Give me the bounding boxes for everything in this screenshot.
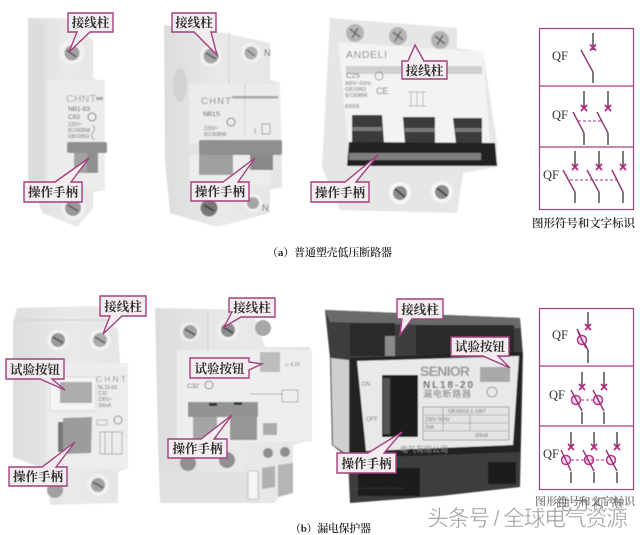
label: handle 3: 操作手柄 — [315, 185, 365, 200]
symbol panel: residual current symbols — [539, 308, 634, 490]
label: handle 6 — [337, 432, 402, 473]
symbol panel: residual current symbols: QF — [543, 447, 559, 461]
breaker photo: SENIOR NL18-20: 230V 50Hz — [425, 417, 450, 423]
breaker photo: SENIOR NL18-20: · · · · · · · · · · · · · · · · — [355, 486, 403, 492]
breaker photo: 3-pole ANDELI C25: GB10963 — [345, 87, 366, 93]
breaker photo: 3-pole ANDELI C25: CE — [376, 86, 389, 96]
label: handle 1 — [24, 158, 89, 202]
breaker photo: 1-pole CHNT NB1-63: NB1-63 — [68, 106, 90, 113]
breaker photo: 1-pole CHNT NB1-63 — [28, 18, 107, 227]
breaker photo: CHNT NL16-63 residual current: 230V~ — [98, 397, 113, 403]
breaker photo: 3-pole ANDELI C25 — [322, 18, 497, 213]
breaker photo: 2-pole CHNT NB1S: NB1S — [203, 111, 221, 118]
symbol panel: ordinary breaker symbols — [539, 28, 634, 210]
breaker photo: SENIOR NL18-20: 20A — [425, 425, 435, 431]
label: terminal 1: 接线柱 — [72, 15, 110, 30]
label: terminal 4: 接线柱 — [104, 299, 142, 314]
caption: symbol panel a: 图形符号和文字标识 — [532, 216, 636, 230]
symbol panel: ordinary breaker symbols: QF — [543, 168, 559, 182]
label: terminal 2 — [172, 13, 217, 55]
breaker photo: 1-pole CHNT NB1-63: CHNT — [66, 93, 97, 105]
breaker photo: 1-pole CHNT NB1-63: C63 — [68, 114, 80, 121]
caption: section a: （a）普通塑壳低压断路器 — [267, 245, 392, 259]
breaker photo: 2-pole CHNT NB1S: N — [262, 203, 268, 213]
label: handle 4 — [9, 442, 75, 486]
label: handle 1: 操作手柄 — [28, 184, 78, 200]
symbol panel: residual current symbols: QF — [549, 388, 565, 402]
breaker photo: CHNT NL16-63 residual current: NL16-63 — [98, 385, 117, 391]
label: terminal 6 — [397, 299, 443, 335]
breaker photo: CHNT NL16-63 residual current: C32 — [98, 391, 107, 397]
breaker photo: 3-pole ANDELI C25: ANDELI — [346, 49, 387, 61]
watermark: account name overlay: 电力视觉 — [555, 496, 625, 514]
label: handle 5 — [168, 415, 232, 458]
breaker photo: SENIOR NL18-20: NL18-20 — [423, 380, 473, 391]
label: test button 6: 试验按钮 — [455, 339, 505, 354]
breaker photo: 2-pole CHNT NB1S: IEC60898 — [204, 132, 226, 138]
breaker photo: SENIOR NL18-20: 30mA — [475, 433, 489, 439]
breaker photo: CHNT C32 residual current: C32 — [187, 383, 199, 390]
breaker photo: SENIOR NL18-20 — [325, 310, 523, 503]
breaker photo: SENIOR NL18-20: SENIOR — [420, 363, 470, 379]
symbol panel: residual current symbols: QF — [552, 328, 568, 342]
breaker photo: SENIOR NL18-20: ON — [362, 382, 370, 388]
label: test button 4: 试验按钮 — [10, 362, 60, 377]
label: handle 2 — [191, 158, 255, 201]
label: terminal 6: 接线柱 — [401, 302, 439, 317]
breaker photo: SENIOR NL18-20: 电气有限公司 — [400, 444, 448, 455]
labels — [6, 13, 510, 486]
breaker photo: 1-pole CHNT NB1-63: GB10963 — [68, 134, 89, 140]
breaker photo: CHNT NL16-63 residual current — [13, 306, 128, 505]
caption: section b: （b）漏电保护器 — [290, 521, 371, 535]
label: terminal 3: 接线柱 — [406, 63, 444, 78]
symbol panel: ordinary breaker symbols: QF — [552, 49, 568, 63]
breaker photo: SENIOR NL18-20: 漏电断路器 — [423, 387, 471, 400]
label: handle 4: 操作手柄 — [13, 469, 63, 484]
caption: symbol panel b (partly covered): 图形符号和文字标识 — [535, 494, 636, 508]
breaker photo: SENIOR NL18-20: OFF — [366, 417, 378, 423]
breaker photo: 2-pole CHNT NB1S: N — [264, 48, 270, 58]
breaker photo: 3-pole ANDELI C25: 400V~50Hz — [345, 81, 372, 87]
breaker photo: 2-pole CHNT NB1S — [164, 25, 282, 227]
label: handle 3 — [311, 155, 378, 202]
label: test button 5: 试验按钮 — [194, 361, 245, 376]
breaker photo: CHNT C32 residual current: ◇ 4.15 — [285, 362, 300, 368]
breaker photo: 2-pole CHNT NB1S: 220V~ — [204, 126, 219, 132]
breaker photo: CHNT C32 residual current — [155, 308, 312, 503]
label: terminal 4 — [100, 296, 146, 334]
breaker photo: CHNT NL16-63 residual current: 30mA — [98, 403, 112, 409]
watermark: 头条号 / 全球电气资源 — [427, 506, 628, 531]
label: terminal 5 — [224, 298, 275, 327]
breaker photo: SENIOR NL18-20: GB16916.1-1997 — [448, 409, 486, 415]
label: test button 6 — [451, 337, 510, 368]
breaker photo: 1-pole CHNT NB1-63: IEC60898 — [68, 128, 90, 134]
label: terminal 2: 接线柱 — [175, 15, 213, 30]
label: handle 5: 操作手柄 — [172, 441, 223, 456]
breaker photo: 3-pole ANDELI C25: 6000A — [345, 104, 360, 110]
label: test button 5 — [190, 358, 262, 378]
breaker photo: CHNT NL16-63 residual current: CHNT — [96, 374, 126, 384]
breaker photo: 1-pole CHNT NB1-63: 220V~ — [68, 122, 83, 128]
breaker photo: 3-pole ANDELI C25: C25 — [346, 71, 360, 80]
label: handle 2: 操作手柄 — [195, 184, 245, 199]
label: terminal 1 — [68, 13, 113, 52]
symbol panel: ordinary breaker symbols: QF — [552, 108, 568, 122]
label: terminal 3 — [402, 45, 447, 79]
label: test button 4 — [6, 359, 65, 390]
breaker photo: 3-pole ANDELI C25: IEC60898 — [345, 93, 367, 99]
label: handle 6: 操作手柄 — [341, 456, 392, 471]
label: terminal 5: 接线柱 — [233, 300, 271, 315]
breaker photo: 2-pole CHNT NB1S: CHNT — [201, 96, 231, 107]
